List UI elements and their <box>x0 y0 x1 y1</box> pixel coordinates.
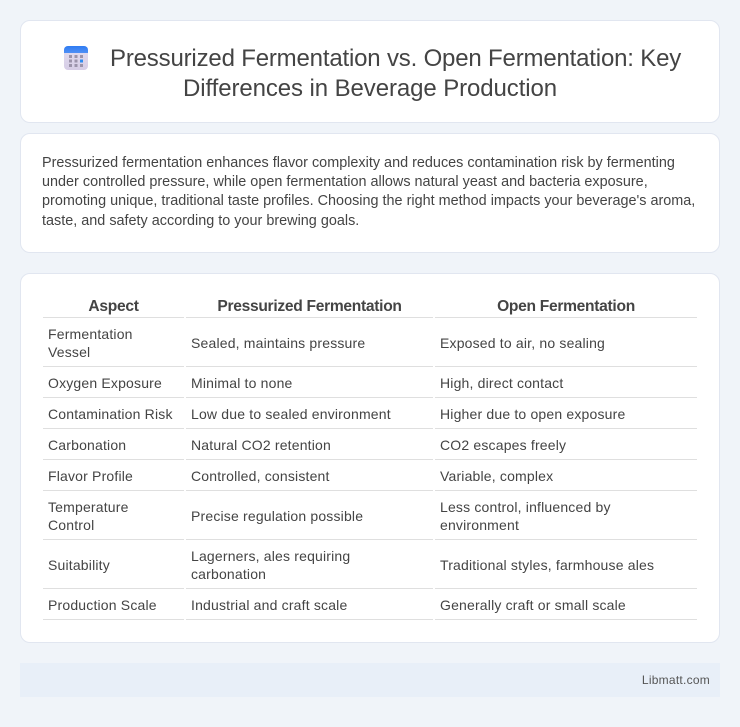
row: Fermentation Vessel <box>48 326 133 360</box>
row: Fermentation Vessel: Fermentation <box>48 326 133 342</box>
intro text: Pressurized fermentation enhances flavor complexity and reduces contamination risk by fermenting <box>42 154 675 170</box>
title: Differences in Beverage Production <box>183 75 557 102</box>
intro text: taste, and safety according to your brewing goals. <box>42 213 359 229</box>
comparison table: Natural CO2 retention <box>191 437 331 453</box>
comparison table: Industrial and craft scale <box>191 597 347 613</box>
comparison table: CO2 escapes freely <box>440 437 566 453</box>
comparison table: Minimal to none <box>191 375 293 391</box>
comparison table: Exposed to air, no sealing <box>440 335 605 351</box>
row: Flavor Profile: Flavor Profile <box>48 468 133 484</box>
comparison table: Sealed, maintains pressure <box>191 335 365 351</box>
intro text: promoting unique, traditional taste profiles. Choosing the right method impacts your beverage's aroma, <box>42 193 695 209</box>
row: Oxygen Exposure: Oxygen Exposure <box>48 375 162 391</box>
row: Fermentation Vessel: Vessel <box>48 344 90 360</box>
comparison table: Controlled, consistent <box>191 468 330 484</box>
header: Pressurized Fermentation: Pressurized Fermentation <box>217 298 402 315</box>
comparison table: Precise regulation possible <box>191 508 363 524</box>
row: Temperature Control: Control <box>48 517 94 533</box>
intro text <box>42 154 695 229</box>
row: Temperature Control: Temperature <box>48 499 129 515</box>
comparison table: High, direct contact <box>440 375 563 391</box>
icon: calendar <box>64 46 88 70</box>
row: Suitability: Suitability <box>48 557 110 573</box>
comparison table: Higher due to open exposure <box>440 406 625 422</box>
title: Pressurized Fermentation vs. Open Fermentation: Key <box>110 45 681 72</box>
header card <box>20 20 720 123</box>
title <box>110 45 682 102</box>
intro text: under controlled pressure, while open fermentation allows natural yeast and bacteria exposure, <box>42 174 648 190</box>
row: Carbonation: Carbonation <box>48 437 126 453</box>
row: Contamination Risk: Contamination Risk <box>48 406 173 422</box>
comparison table: carbonation <box>191 566 266 582</box>
comparison table: environment <box>440 517 519 533</box>
intro card <box>20 133 720 253</box>
comparison table: Low due to sealed environment <box>191 406 391 422</box>
header: Open Fermentation: Open Fermentation <box>497 298 635 315</box>
comparison table: Variable, complex <box>440 468 553 484</box>
comparison table: Generally craft or small scale <box>440 597 626 613</box>
row: Temperature Control <box>48 499 129 533</box>
footer credit: Libmatt.com <box>642 673 710 687</box>
comparison table: Traditional styles, farmhouse ales <box>440 557 654 573</box>
comparison table: Less control, influenced by <box>440 499 611 515</box>
comparison table: Lagerners, ales requiring <box>191 548 350 564</box>
row: Production Scale: Production Scale <box>48 597 157 613</box>
table card <box>20 273 720 643</box>
footer bar <box>20 663 720 697</box>
header: Aspect: Aspect <box>88 298 139 315</box>
